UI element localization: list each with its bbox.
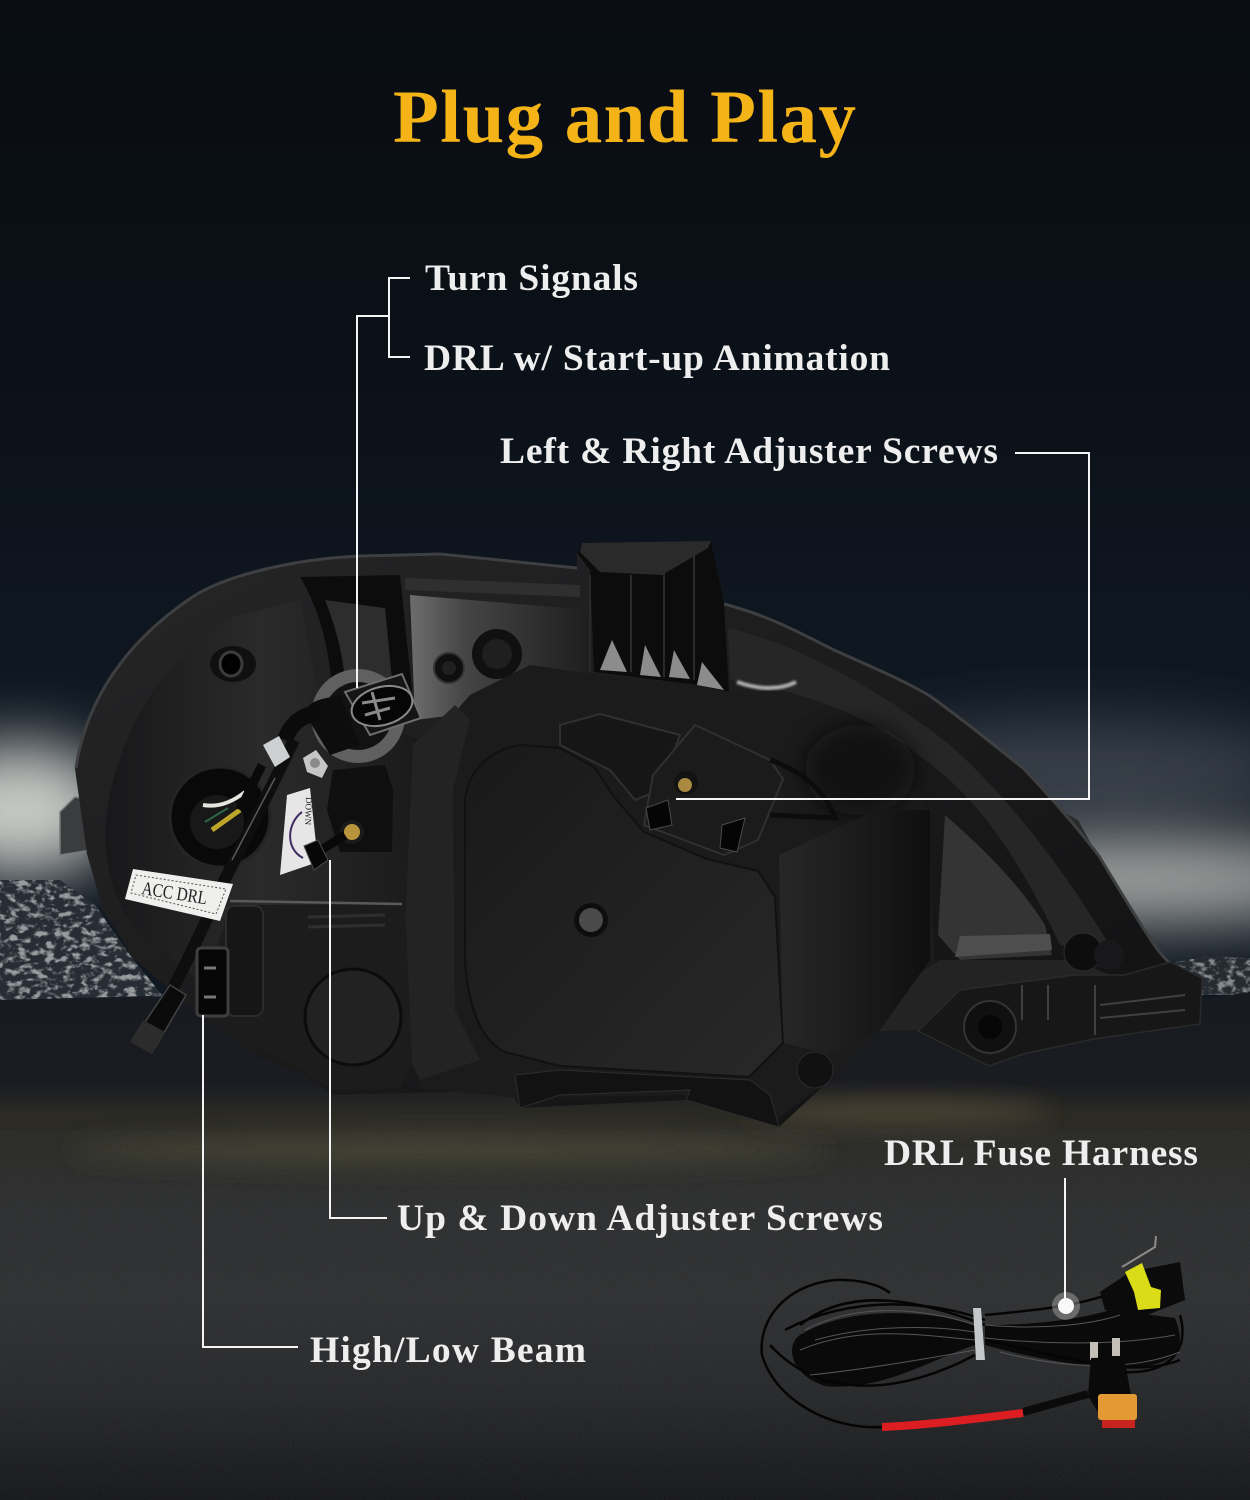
back cover plate: [465, 745, 783, 1077]
bulb wires: [190, 765, 262, 849]
plate lower highlight: [955, 934, 1052, 957]
left/right adjuster bracket: [644, 725, 835, 855]
socket cable: [285, 712, 320, 740]
upper rim strip: [405, 578, 580, 597]
red fuse base: [1102, 1414, 1135, 1428]
label: DRL with start-up animation: DRL w/ Start-up Animation: [424, 338, 890, 379]
metal clip: [1122, 1236, 1156, 1267]
callout dot: [1052, 1292, 1080, 1320]
red sleeve: [882, 1413, 1023, 1427]
clear lens tab left: [60, 797, 92, 855]
connector bodies: [1100, 1262, 1185, 1318]
ACC DRL tag: ACC DRL: [140, 878, 209, 909]
fuse holder: [1088, 1357, 1131, 1412]
tail wires: [1023, 1394, 1088, 1412]
direction sticker: [280, 788, 318, 875]
lower right web: [880, 960, 1110, 1031]
background: cloud band: [0, 720, 1250, 922]
left coil mass: [792, 1313, 975, 1387]
lower body ribs: [308, 915, 385, 927]
round cap: [305, 969, 401, 1065]
rim highlight streak: [737, 682, 796, 688]
background: snowy mountain right: [1175, 956, 1250, 995]
vertical strip: [779, 810, 930, 1055]
coil wires: [762, 1280, 1182, 1427]
label: Up and down adjuster screws: Up & Down Adjuster Screws: [397, 1198, 883, 1239]
left bulb socket: [170, 767, 270, 867]
headlight assembly: [60, 541, 1202, 1127]
screw bracket: [303, 750, 328, 778]
DRL fuse wiring harness: [762, 1236, 1185, 1428]
orange fuse: [1098, 1394, 1137, 1420]
upper lit panel: [410, 595, 600, 720]
centre bulb socket ring: [311, 669, 405, 763]
wire highlights: [800, 1311, 1180, 1375]
inner left wall: [105, 600, 420, 985]
arch inner panel: [325, 600, 392, 680]
right mounting bracket: [918, 962, 1202, 1066]
turn signal and DRL connector: [307, 674, 421, 755]
leader line: left and right adjuster screws: [676, 453, 1089, 799]
left body band: [400, 705, 480, 1080]
label: DRL fuse harness: DRL Fuse Harness: [884, 1133, 1198, 1174]
label: Left and right adjuster screws: Left & Right Adjuster Screws: [500, 431, 998, 472]
housing silhouette: [75, 541, 1202, 1127]
dark arch rib: [300, 575, 412, 740]
leader line: high/low beam: [203, 1015, 298, 1347]
label: High/Low beam: High/Low Beam: [310, 1330, 586, 1371]
lower left body: [215, 905, 412, 1090]
socket inner: [324, 682, 392, 750]
drain pipe: [210, 646, 256, 682]
fin bracket: [577, 541, 729, 692]
lower body lit edge: [230, 901, 402, 904]
up/down screw connector: [304, 835, 345, 870]
cover plug: [574, 903, 608, 937]
background: ground: [0, 992, 1250, 1500]
title: Plug and Play: [393, 76, 856, 159]
upper bosses: [434, 629, 522, 683]
background: brown ground patch: [750, 1100, 1050, 1124]
right coil mass: [985, 1310, 1180, 1368]
yellow seals: [1125, 1263, 1161, 1310]
fuse blades: [1090, 1338, 1120, 1360]
brass up/down screw: [340, 820, 364, 844]
background: snowy mountain left: [0, 880, 170, 1005]
lower mounting feet: [515, 1070, 779, 1127]
leader line: up and down adjuster screws: [330, 860, 387, 1218]
interior curved rim band: [728, 628, 1115, 955]
direction sticker: DOWN: [303, 797, 314, 826]
central body: [413, 665, 960, 1118]
lens recess panel: [226, 906, 263, 1016]
background: olive ground streak: [70, 1134, 830, 1166]
ACC DRL tag: [125, 869, 233, 921]
high/low beam connector: [197, 948, 228, 1016]
leader line: DRL fuse harness: [1064, 1178, 1066, 1305]
leader line: turn signals and DRL bracket: [357, 278, 410, 688]
small top blocks: [560, 714, 680, 800]
clear lens tab right: [1060, 810, 1100, 860]
right side plate: [938, 815, 1052, 960]
background: asphalt grain: [0, 1130, 1250, 1500]
dark adjuster block: [327, 765, 393, 852]
DRL cable end plug: [130, 985, 186, 1054]
thin silver cable: [232, 778, 275, 860]
cable tie: [973, 1308, 985, 1360]
white wire sleeve: [263, 736, 290, 767]
rim edge highlight: [76, 554, 1170, 963]
lower cylinder bosses: [797, 933, 1124, 1088]
dark recess shadow: [805, 725, 915, 815]
main DRL cable: [152, 740, 294, 1030]
label: Turn Signals: Turn Signals: [425, 258, 638, 299]
